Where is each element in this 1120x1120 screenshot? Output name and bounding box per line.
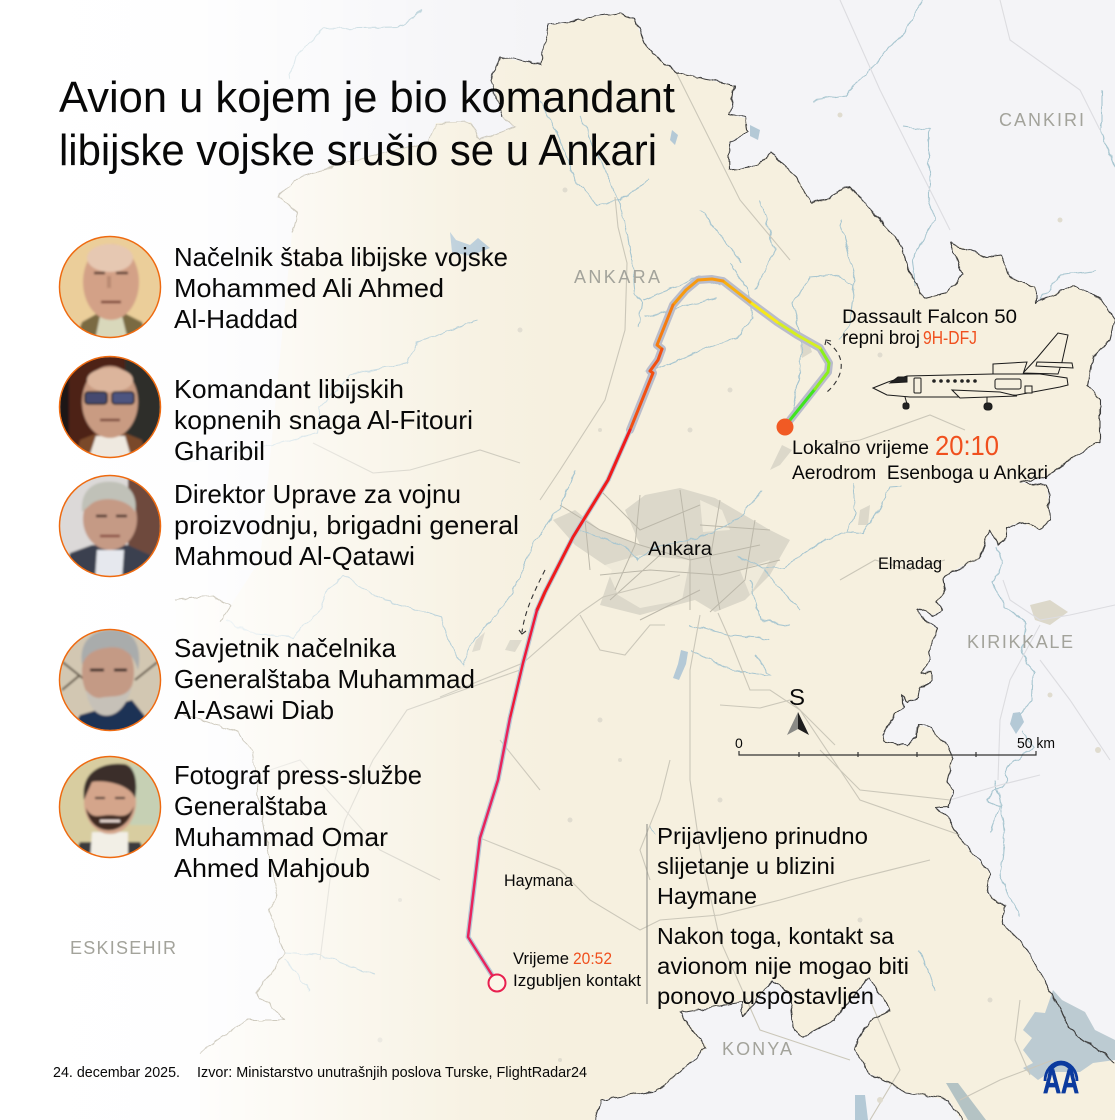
emergency landing note: slijetanje u blizini	[657, 853, 835, 879]
lake: Tuz	[1023, 990, 1115, 1080]
text: person 2: Gharibil	[174, 436, 265, 466]
person 3	[59, 475, 519, 580]
text: person 3	[174, 479, 519, 571]
emergency landing note	[657, 823, 909, 1009]
flight path	[468, 279, 829, 975]
text: person 5: Generalštaba	[174, 791, 328, 821]
text: person 5: Muhammad Omar	[174, 822, 388, 852]
map region labels: ANKARA	[574, 267, 660, 287]
scale bar: 50 km	[1017, 735, 1055, 752]
person 1	[59, 236, 508, 340]
map region labels: KIRIKKALE	[967, 632, 1073, 652]
text: person 5: Fotograf press-službe	[174, 760, 422, 790]
text: person 2: kopnenih snaga Al-Fitouri	[174, 405, 473, 435]
crash label	[513, 950, 641, 990]
crash label: Vrijeme	[513, 950, 569, 968]
date and source: 24. decembar 2025.	[53, 1065, 180, 1081]
emergency landing note: Nakon toga, kontakt sa	[657, 923, 894, 949]
scale bar	[735, 735, 1055, 757]
text: person 1: Načelnik štaba libijske vojske	[174, 242, 508, 272]
person 5	[59, 756, 422, 883]
province border: faded section	[175, 117, 515, 1053]
text: person 1: Mohammed Ali Ahmed	[174, 273, 444, 303]
portrait: Al-Qatawi	[59, 475, 161, 580]
title: Avion u kojem je bio komandant	[59, 73, 675, 122]
crash label: Izgubljen kontakt	[513, 972, 641, 990]
date and source: Izvor: Ministarstvo unutrašnjih poslova Turske, FlightRadar24	[197, 1065, 587, 1081]
logo: AA: AA	[1043, 1063, 1079, 1101]
text: person 3: proizvodnju, brigadni general	[174, 510, 519, 540]
province border: dark section	[491, 13, 1115, 1120]
text: person 4: Al-Asawi Diab	[174, 695, 334, 725]
north arrow: S	[789, 684, 805, 710]
title	[59, 73, 675, 175]
departure label	[792, 430, 1048, 484]
left white fade	[0, 0, 560, 1120]
text: person 5: Ahmed Mahjoub	[174, 853, 370, 883]
city labels	[504, 538, 942, 890]
portrait: Omar Ahmed Mahjoub	[59, 756, 161, 860]
aircraft label: repni broj	[842, 328, 920, 349]
aircraft label	[842, 307, 1017, 349]
terrain specks	[378, 112, 1101, 1103]
emergency landing note: ponovo uspostavljen	[657, 983, 874, 1009]
crash label: 20:52	[573, 950, 612, 968]
portrait: Al-Fitouri Gharibil	[59, 356, 161, 460]
text: person 1: Al-Haddad	[174, 304, 298, 334]
direction arrow: south-west	[519, 570, 545, 634]
map region labels: ESKISEHIR	[70, 938, 176, 958]
path halo	[630, 279, 829, 430]
map region labels: KONYA	[722, 1039, 792, 1059]
map region labels: CANKIRI	[999, 110, 1084, 130]
city labels: Ankara	[648, 538, 712, 560]
aircraft label: Dassault Falcon 50	[842, 307, 1017, 328]
text: person 5	[174, 760, 422, 883]
text: person 3: Mahmoud Al-Qatawi	[174, 541, 415, 571]
end point: contact lost	[488, 974, 506, 992]
map region labels	[70, 110, 1084, 1059]
roads	[240, 0, 1115, 1120]
path colours	[790, 389, 815, 420]
text: person 4: Savjetnik načelnika	[174, 633, 397, 663]
rivers	[180, 0, 1115, 990]
departure label: Lokalno vrijeme	[792, 438, 929, 459]
north arrow	[787, 684, 809, 735]
aircraft illustration	[873, 333, 1073, 410]
emergency landing note: Haymane	[657, 883, 757, 909]
title: libijske vojske srušio se u Ankari	[59, 126, 657, 175]
text: person 2	[174, 374, 473, 466]
direction arrow: north-east	[825, 340, 841, 392]
departure label: Aerodrom Esenboga u Ankari	[792, 463, 1048, 484]
city labels: Haymana	[504, 872, 574, 890]
emergency landing note: Prijavljeno prinudno	[657, 823, 868, 849]
divider line	[646, 824, 648, 1004]
urban area: Ankara	[472, 340, 1068, 652]
emergency landing note: avionom nije mogao biti	[657, 953, 909, 979]
scale bar: 0	[735, 735, 743, 751]
text: person 4	[174, 633, 475, 725]
aircraft label: 9H-DFJ	[923, 328, 977, 348]
start point: Esenboga	[776, 418, 794, 436]
text: person 3: Direktor Uprave za vojnu	[174, 479, 461, 509]
person 4	[59, 629, 475, 733]
text: person 4: Generalštaba Muhammad	[174, 664, 475, 694]
city labels: Elmadag	[878, 555, 942, 573]
portrait: Al-Asawi Diab	[59, 629, 161, 733]
portrait: Al-Haddad	[59, 236, 161, 340]
person 2	[59, 356, 473, 466]
departure label: 20:10	[935, 430, 999, 461]
text: person 2: Komandant libijskih	[174, 374, 404, 404]
text: person 1	[174, 242, 508, 334]
